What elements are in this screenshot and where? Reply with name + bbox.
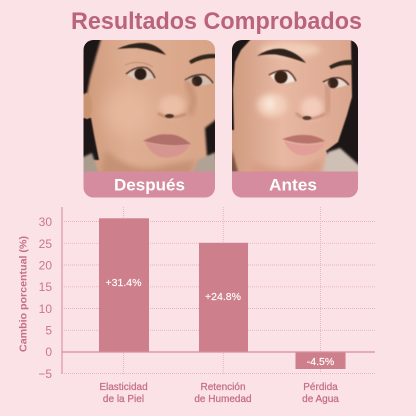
x label: pérdida: de Agua bbox=[302, 394, 339, 405]
title: Resultados Comprobados bbox=[71, 8, 362, 35]
nose bbox=[326, 82, 329, 114]
nose bbox=[187, 80, 194, 115]
grid lines bbox=[62, 207, 375, 374]
y tick labels: 25 bbox=[39, 237, 52, 251]
panel: antes bbox=[230, 38, 360, 198]
photo: face before bbox=[230, 38, 360, 176]
value: -4.5%: -4.5% bbox=[307, 356, 334, 368]
y tick labels: 20 bbox=[39, 258, 52, 272]
y axis title: Cambio porcentual (%) bbox=[18, 236, 30, 352]
label bar: después bbox=[84, 40, 215, 198]
bar: retención bbox=[199, 243, 248, 352]
label: antes: Antes bbox=[269, 176, 317, 194]
y tick labels: 30 bbox=[39, 215, 52, 229]
bar: pérdida bbox=[296, 352, 346, 369]
x label: elasticidad: de la Piel bbox=[103, 394, 144, 405]
y tick labels: 5 bbox=[45, 324, 52, 338]
lips bbox=[282, 135, 325, 144]
value: +31.4%: +31.4% bbox=[106, 277, 141, 289]
y tick labels: 10 bbox=[39, 302, 52, 316]
label bar: antes bbox=[232, 40, 358, 198]
y tick labels: −5 bbox=[38, 367, 52, 381]
y tick labels bbox=[38, 215, 52, 381]
label: después: Después bbox=[114, 176, 185, 194]
y tick labels: 15 bbox=[39, 280, 52, 294]
y tick labels: 0 bbox=[45, 345, 52, 359]
value: +24.8%: +24.8% bbox=[205, 291, 241, 303]
zero line bbox=[62, 351, 375, 353]
panel: después bbox=[80, 36, 218, 198]
brows bbox=[257, 49, 306, 63]
eyes bbox=[127, 68, 154, 80]
lips bbox=[143, 134, 191, 145]
y axis bbox=[61, 207, 63, 374]
x label: retención: Retención bbox=[200, 382, 246, 393]
x label: retención: de Humedad bbox=[194, 394, 252, 405]
x label: pérdida: Pérdida bbox=[303, 382, 338, 393]
x label: elasticidad: Elasticidad bbox=[99, 382, 148, 393]
bar chart bbox=[18, 207, 375, 405]
photo: face after bbox=[84, 40, 215, 172]
eyes bbox=[270, 71, 295, 84]
brows bbox=[117, 43, 166, 55]
bar: elasticidad bbox=[99, 218, 149, 352]
